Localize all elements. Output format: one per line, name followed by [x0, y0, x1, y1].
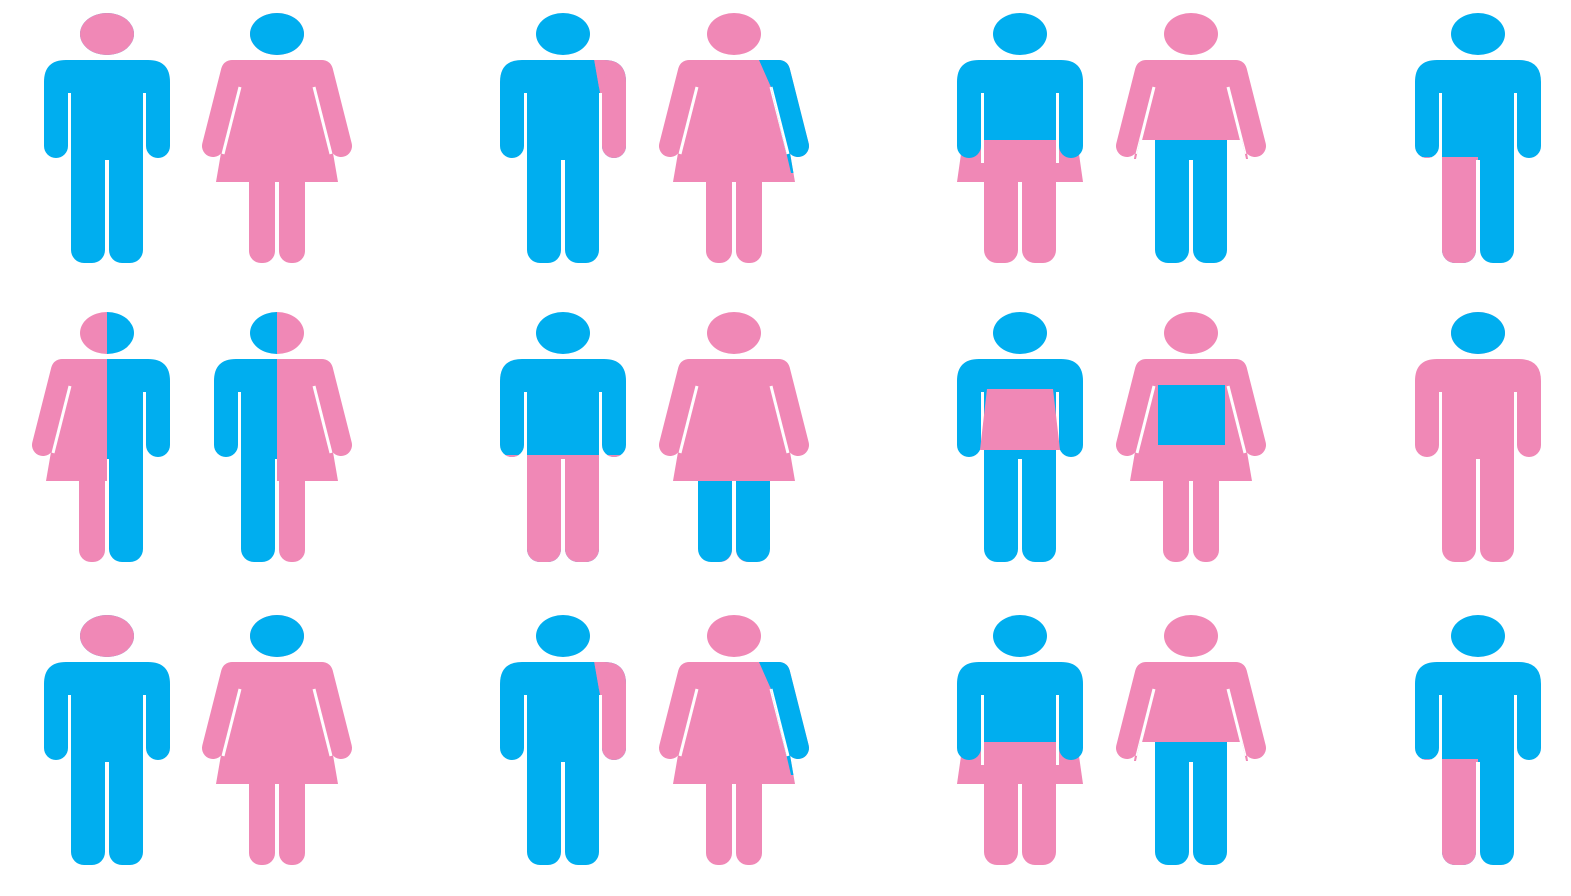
figure: woman pink with blue arm: [670, 615, 798, 865]
figure: woman pink with blue trousers: [1127, 615, 1255, 865]
row 2: [43, 312, 1541, 562]
figure: man blue with pink leg: [1415, 615, 1541, 865]
figure: man blue with pink dress torso: [957, 312, 1083, 562]
row 3: [44, 615, 1541, 865]
figure: woman pink with blue head: [213, 615, 341, 865]
figure: woman pink with blue square torso: [1127, 312, 1255, 562]
figure: man blue with pink skirt: [957, 13, 1083, 263]
figure: man pink with blue head: [1415, 312, 1541, 562]
figure: man blue with pink arm: [500, 13, 626, 263]
figure: man blue with pink legs: [500, 312, 626, 562]
figure: woman pink with blue legs: [670, 312, 798, 562]
figure: half man blue / half woman pink: [213, 312, 341, 562]
figure: woman pink with blue arm: [670, 13, 798, 263]
figure: woman pink with blue trousers: [1127, 13, 1255, 263]
figure: man blue with pink leg: [1415, 13, 1541, 263]
figure: man blue with pink skirt: [957, 615, 1083, 865]
figure: man blue with pink head: [44, 13, 170, 263]
figure: half woman pink / half man blue: [43, 312, 171, 562]
figure: man blue with pink head: [44, 615, 170, 865]
figure: woman pink with blue head: [213, 13, 341, 263]
figure: man blue with pink arm: [500, 615, 626, 865]
row 1: [44, 13, 1541, 263]
